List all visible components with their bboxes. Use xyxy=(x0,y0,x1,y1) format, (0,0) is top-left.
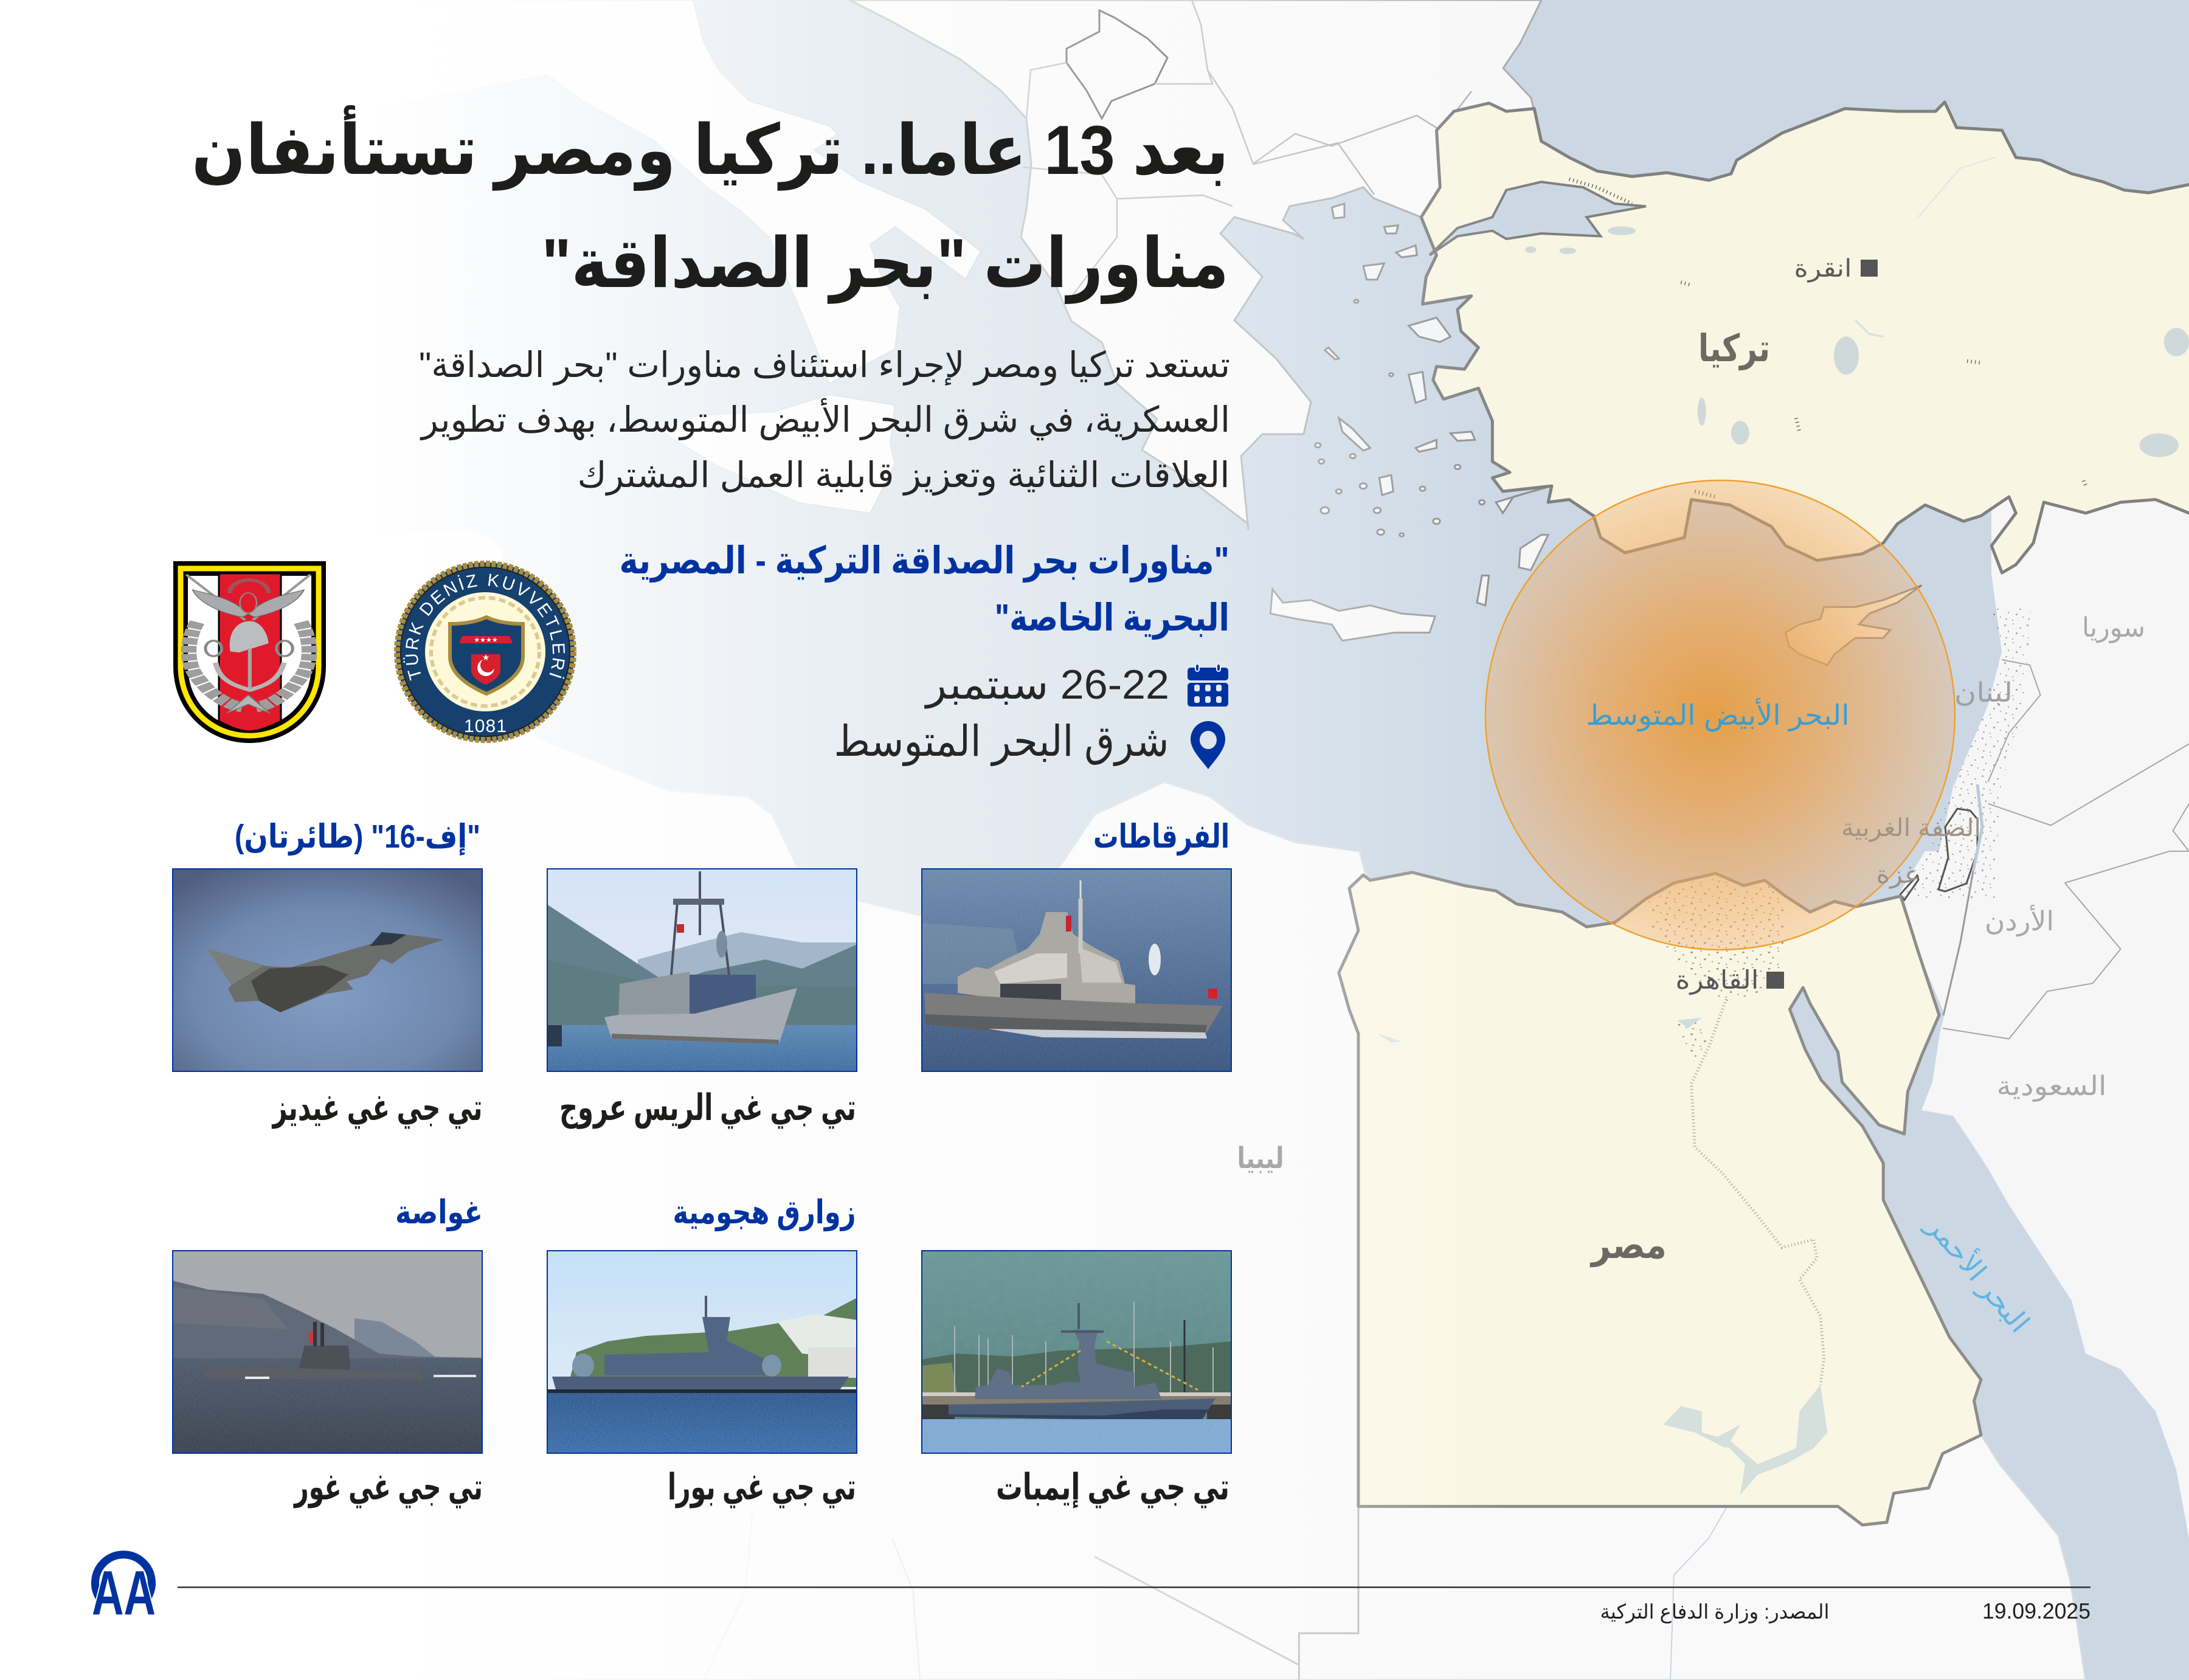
land: Balkans and Greece xyxy=(849,0,1541,530)
label: West Bank: الضفة الغربية xyxy=(1841,815,1981,842)
Nile delta settlements xyxy=(1646,876,1786,1004)
label: Jordan: الأردن xyxy=(1985,904,2054,937)
date text: 22‏-‏26 سبتمبر xyxy=(924,662,1169,709)
label: Ankara xyxy=(1794,255,1878,283)
exercise name heading: البحرية الخاصة" xyxy=(995,597,1229,640)
photo: aircraft xyxy=(172,868,483,1072)
island: Crete xyxy=(1270,589,1435,641)
photo: frigate F-245 xyxy=(921,868,1232,1072)
photo: TCG Imbat xyxy=(921,1250,1232,1454)
emblem: Turkish Naval Forces xyxy=(394,561,576,743)
seal shield xyxy=(450,617,523,694)
intro text: العلاقات الثنائية وتعزيز قابلية العمل المشترك xyxy=(578,455,1229,496)
label: Syria: سوريا xyxy=(2082,613,2145,643)
footer xyxy=(92,1555,2090,1628)
country: Turkey xyxy=(1421,102,2189,665)
label: Turkey: تركيا xyxy=(1698,328,1770,370)
land: Levant and Arabia xyxy=(1898,486,2189,1538)
caption: TCG Imbat: تي جي غي إيمبات xyxy=(996,1467,1229,1509)
date stamp: 19.09.2025 xyxy=(1982,1599,2090,1623)
country: Egypt xyxy=(1339,873,1981,1525)
emblem: Turkish Naval Forces: ★ xyxy=(482,652,489,662)
label: Ankara: انقرة xyxy=(1794,255,1852,283)
title xyxy=(192,105,1229,304)
label: Cairo xyxy=(1676,966,1784,995)
seal lettering xyxy=(418,586,553,697)
borders: neighbouring countries xyxy=(704,851,2189,1680)
Levant settlements xyxy=(1903,608,2031,900)
Sea of Marmara xyxy=(1430,182,1646,255)
exercise name heading: "مناورات بحر الصداقة التركية - المصرية xyxy=(619,540,1229,582)
category label: attack boats: زوارق هجومية xyxy=(673,1194,856,1231)
title: بعد 13 عاما.. تركيا ومصر تستأنفان xyxy=(192,105,1229,191)
category label: submarine: غواصة xyxy=(395,1194,483,1231)
intro text: العسكرية، في شرق البحر الأبيض المتوسط، بهدف تطوير xyxy=(420,398,1230,441)
label: Egypt: مصر xyxy=(1589,1225,1667,1267)
location text: شرق البحر المتوسط xyxy=(834,717,1169,766)
icon: location pin xyxy=(1191,721,1225,769)
map labels xyxy=(1237,255,2145,1340)
Turkish lakes xyxy=(1525,226,2189,457)
emblem: Turkish Naval Forces: TÜRK DENİZ KUVVETLERİ xyxy=(403,574,565,681)
Istanbul and towns xyxy=(1569,179,2086,497)
island: Rhodes xyxy=(1519,535,1548,570)
land: Sicily xyxy=(658,395,895,513)
Balkan borders xyxy=(1023,0,1471,297)
logo: Anadolu Agency: AA xyxy=(92,1558,156,1628)
location row xyxy=(834,717,1225,769)
label: Gaza: غزة xyxy=(1876,862,1918,889)
photo: submarine xyxy=(172,1250,483,1454)
intro text: تستعد تركيا ومصر لإجراء استئناف مناورات "بحر الصداقة" xyxy=(419,345,1230,386)
Kosovo border xyxy=(1067,10,1167,119)
label: Libya: ليبيا xyxy=(1237,1142,1284,1175)
source: المصدر: وزارة الدفاع التركية xyxy=(1600,1600,1829,1623)
label: Red Sea: البحر الأحمر xyxy=(1919,1208,2037,1340)
icon: calendar xyxy=(1188,664,1228,707)
borders: Levant xyxy=(1900,784,1982,1015)
land: Italy xyxy=(0,0,981,384)
island group: Aegean xyxy=(1315,204,1552,606)
caption: TCG Gediz: تي جي غي غيديز xyxy=(271,1087,483,1129)
Lake Nasser xyxy=(1664,1385,1827,1495)
footer rule xyxy=(178,1586,2090,1588)
caption: TCG Bora: تي جي غي بورا xyxy=(668,1467,856,1509)
land: North Africa xyxy=(0,529,2086,1680)
logo: Anadolu Agency xyxy=(92,1555,156,1628)
date row xyxy=(924,662,1228,709)
emblem: Turkish Naval Forces: 1081 xyxy=(464,716,507,736)
category label: frigates: الفرقاطات xyxy=(1093,818,1229,856)
photo: TCG Reis Oruc xyxy=(547,868,857,1072)
label: Mediterranean Sea: البحر الأبيض المتوسط xyxy=(1586,697,1850,732)
emblem: Turkish General Staff xyxy=(181,569,319,736)
photo: TCG Bora xyxy=(547,1250,857,1454)
label: Cairo: القاهرة xyxy=(1676,966,1758,995)
category label: F-16 aircraft: "إف-16" (طائرتان) xyxy=(235,818,480,856)
emblem: Turkish Naval Forces: ★★★★ xyxy=(474,637,498,644)
Nile valley xyxy=(1692,999,1824,1385)
intro text xyxy=(419,345,1230,496)
label: Lebanon: لبنان xyxy=(1954,678,2013,708)
caption: TCG Reis Oruc: تي جي غي الريس عروج xyxy=(559,1087,856,1129)
exercise area circle xyxy=(1485,480,1955,950)
label: Saudi Arabia: السعودية xyxy=(1997,1071,2106,1102)
caption: TCG Gur: تي جي غي غور xyxy=(293,1467,483,1509)
title: مناورات "بحر الصداقة" xyxy=(542,225,1229,304)
island: Cyprus xyxy=(1786,586,1921,665)
exercise name heading xyxy=(619,540,1229,640)
